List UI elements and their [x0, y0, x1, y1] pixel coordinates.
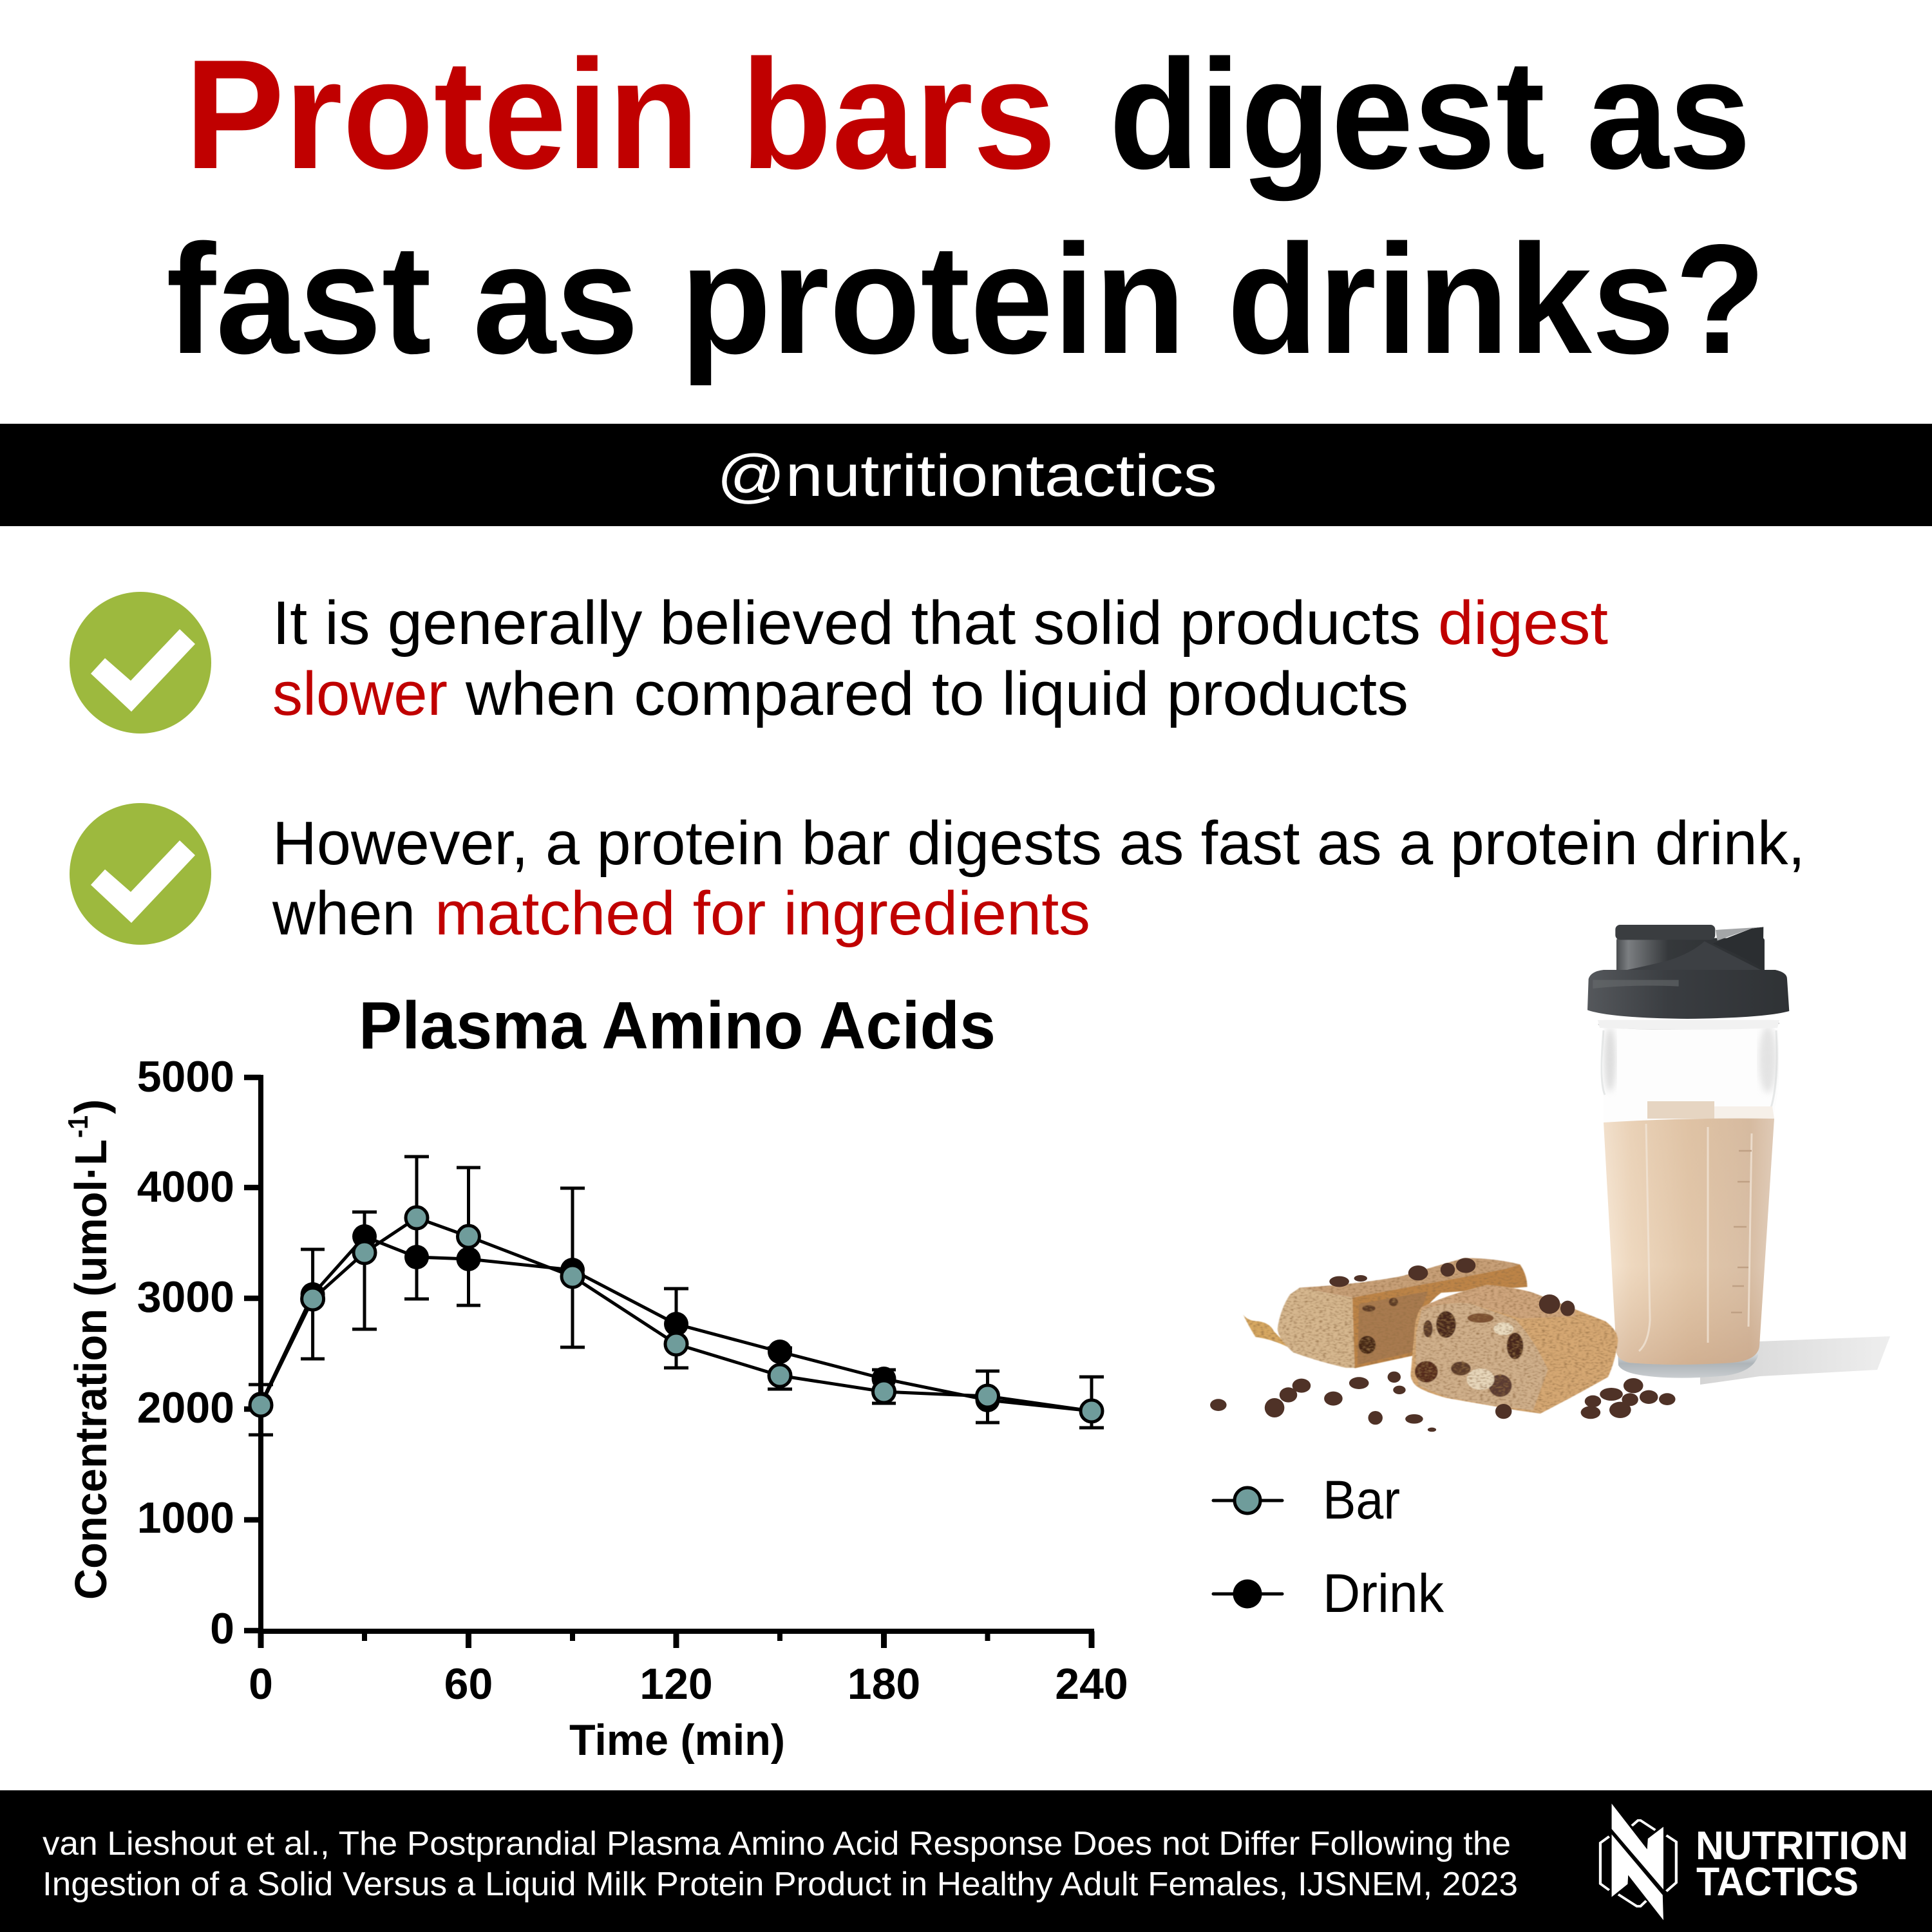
- y axis label: -1: [62, 1115, 94, 1138]
- back bar piece: [1244, 1258, 1527, 1368]
- x axis tick labels: 120: [639, 1660, 713, 1709]
- y axis tick labels: 0: [210, 1604, 234, 1653]
- y axis label: Concentration (umol·L: [66, 1139, 116, 1600]
- series: bar: [250, 1207, 1103, 1422]
- text block: bullet 1: It is generally believed that solid products: [272, 589, 1421, 658]
- shaker glass: [1598, 1019, 1779, 1124]
- text block: bullet 2: matched for ingredients: [435, 879, 1090, 948]
- logo wordmark: NUTRITION: [1696, 1824, 1908, 1868]
- title: digest as: [1109, 28, 1751, 202]
- shaker milk: [1604, 1119, 1774, 1365]
- x axis tick labels: 180: [848, 1660, 920, 1709]
- chocolate chips: [1210, 1258, 1676, 1432]
- citation: van Lieshout et al., The Postprandial Plasma Amino Acid Response Does not Differ Following the: [43, 1825, 1511, 1862]
- logo emblem: [1600, 1804, 1676, 1920]
- legend item: bar: [1213, 1470, 1400, 1530]
- icon: check mark 1: [70, 592, 211, 734]
- text block: bullet 2: [272, 809, 1805, 948]
- logo wordmark: [1696, 1824, 1908, 1904]
- illustration: protein shaker: [1587, 925, 1890, 1385]
- axes and ticks: [244, 1075, 1094, 1648]
- y axis tick labels: [137, 1052, 234, 1653]
- chart heading: Plasma Amino Acids: [359, 989, 996, 1063]
- footer band: [0, 1790, 1932, 1932]
- title: fast as protein drinks?: [166, 213, 1766, 386]
- handle banner: [0, 424, 1932, 526]
- line chart: plasma amino acids: [62, 1052, 1128, 1765]
- shaker foam: [1647, 1101, 1774, 1119]
- text block: bullet 1: digest: [1438, 589, 1608, 658]
- legend: [1213, 1470, 1444, 1624]
- citation: [43, 1825, 1518, 1903]
- text block: bullet 1: [272, 589, 1608, 728]
- y axis tick labels: 3000: [137, 1273, 234, 1321]
- y axis tick labels: 4000: [137, 1162, 234, 1211]
- x axis label: Time (min): [569, 1716, 785, 1765]
- handle banner: @nutritiontactics: [717, 443, 1217, 509]
- text block: bullet 1: when compared to liquid products: [465, 659, 1408, 728]
- text block: bullet 1: slower: [272, 659, 448, 728]
- x axis tick labels: [249, 1660, 1128, 1709]
- error bars: [249, 1157, 1104, 1435]
- x axis tick labels: 0: [249, 1660, 273, 1709]
- title: Protein bars: [185, 28, 1056, 202]
- legend item: bar: Bar: [1323, 1470, 1400, 1530]
- icon: check mark 2: [70, 803, 211, 945]
- illustration: protein bar: [1210, 1258, 1676, 1432]
- y axis tick labels: 5000: [137, 1052, 234, 1101]
- y axis tick labels: 2000: [137, 1383, 234, 1432]
- text block: bullet 2: However, a protein bar digests as fast as a protein drink,: [272, 809, 1805, 878]
- shaker shadow: [1700, 1336, 1890, 1385]
- citation: Ingestion of a Solid Versus a Liquid Milk Protein Product in Healthy Adult Females, IJSNEM, 2023: [43, 1866, 1518, 1903]
- legend item: drink: [1213, 1563, 1444, 1624]
- y axis label: ): [66, 1099, 116, 1114]
- logo wordmark: TACTICS: [1696, 1860, 1859, 1904]
- y axis tick labels: 1000: [137, 1493, 234, 1542]
- front bar piece: [1410, 1285, 1618, 1414]
- legend item: drink: Drink: [1323, 1563, 1444, 1624]
- x axis tick labels: 240: [1055, 1660, 1128, 1709]
- title: [166, 28, 1766, 386]
- shaker lid: [1587, 925, 1789, 1019]
- x axis tick labels: 60: [444, 1660, 493, 1709]
- series: drink: [249, 1224, 1104, 1423]
- shaker base: [1618, 1349, 1758, 1378]
- text block: bullet 2: when: [272, 879, 415, 948]
